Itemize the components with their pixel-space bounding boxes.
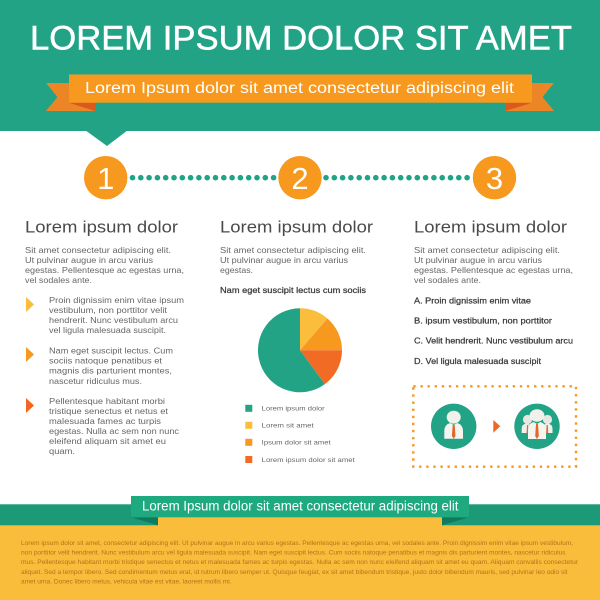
lettered list: C. Velit hendrerit. Nunc vestibulum arcu [414, 336, 573, 346]
footer paragraph: amet urna. Donec libero metus, vehicula vitae est vitae, laoreet mollis mi. [21, 580, 232, 586]
chart subtitle: Nam eget suscipit lectus cum sociis [220, 285, 366, 295]
bullet text 1: vel ligula malesuada suscipit. [49, 325, 166, 335]
bullet text 2 [49, 346, 173, 386]
column 1 intro text: Sit amet consectetur adipiscing elit. [25, 245, 171, 255]
column 2 intro text [220, 245, 366, 275]
bullet text 3 [49, 396, 180, 456]
column 3 intro text: Ut pulvinar augue in arcu varius [414, 255, 542, 265]
bullet text 3: malesuada fames ac turpis [49, 416, 161, 426]
header band [0, 0, 600, 146]
footer ribbon banner [131, 496, 469, 525]
lettered list: D. Vel ligula malesuada suscipit [414, 356, 542, 366]
icon: arrow between people [493, 420, 500, 433]
chart legend: Ipsum dolor sit amet [262, 440, 331, 447]
panel: column 3 [413, 218, 576, 467]
step 3 badge [473, 156, 516, 199]
column 2 intro text: egestas. [220, 265, 253, 275]
bullet text 2: magnis dis parturient montes, [49, 366, 172, 376]
dotted connector 1 to 2 [130, 175, 276, 180]
bullet text 2: Nam eget suscipit lectus. Cum [49, 346, 173, 356]
panel: column 1 [25, 218, 184, 456]
lettered list: B. ipsum vestibulum, non porttitor [414, 316, 552, 326]
step 3 badge: 3 [486, 161, 503, 196]
column 2 heading: Lorem ipsum dolor [220, 218, 373, 236]
icon: red-orange arrow [26, 398, 34, 413]
icon: yellow arrow [26, 297, 34, 312]
column 1 intro text: Ut pulvinar augue in arcu varius [25, 255, 153, 265]
column 3 intro text: Sit amet consectetur adipiscing elit. [414, 245, 560, 255]
bullet text 1: hendrerit. Nunc vestibulum arcu [49, 315, 178, 325]
lettered list [414, 296, 573, 366]
column 2 intro text: Sit amet consectetur adipiscing elit. [220, 245, 366, 255]
bullet text 3: tristique senectus et netus et [49, 406, 169, 416]
footer yellow panel [0, 517, 600, 600]
step 2 badge: 2 [291, 161, 309, 196]
step 1 badge [84, 156, 127, 199]
bullet text 3: Pellentesque habitant morbi [49, 396, 165, 406]
step 2 badge [278, 156, 322, 199]
bullet text 1: vestibulum, non porttitor velit [49, 305, 168, 315]
pie chart [258, 308, 342, 392]
icon: single person [431, 404, 476, 449]
panel: column 2 [220, 218, 373, 464]
dotted callout box [413, 386, 576, 467]
bullet text 3: egestas. Nulla ac sem non nunc [49, 426, 180, 436]
chart legend: Lorem sit amet [262, 423, 314, 430]
title: LOREM IPSUM DOLOR SIT AMET [30, 20, 572, 58]
column 3 intro text: vel sodales ante. [414, 275, 481, 285]
footer paragraph [21, 541, 578, 586]
chart legend: Lorem ipsum dolor sit amet [262, 457, 355, 464]
bullet text 3: quam. [49, 446, 75, 456]
column 3 intro text [414, 245, 573, 285]
column 1 heading: Lorem ipsum dolor [25, 218, 178, 236]
column 1 intro text: egestas. Pellentesque ac egestas urna, [25, 265, 184, 275]
step 1 badge: 1 [97, 161, 114, 196]
column 2 intro text: Ut pulvinar augue in arcu varius [220, 255, 348, 265]
bullet text 2: nascetur ridiculus mus. [49, 376, 142, 386]
dotted connector 2 to 3 [323, 175, 470, 180]
footer paragraph: Lorem ipsum dolor sit amet, consectetur adipiscing elit. Ut pulvinar augue in arcu varius egestas. Pellentesque ac egestas urna, vel sodales ante. Proin dignissim enim vitae ipsum vestibulum, [21, 541, 573, 547]
footer green band [0, 504, 600, 526]
chart legend [245, 405, 355, 464]
bullet text 2: sociis natoque penatibus et [49, 356, 163, 366]
bullet text 1: Proin dignissim enim vitae ipsum [49, 295, 184, 305]
footer ribbon text: Lorem Ipsum dolor sit amet consectetur adipiscing elit [142, 498, 459, 514]
column 3 intro text: egestas. Pellentesque ac egestas urna, [414, 265, 573, 275]
orange ribbon banner [46, 74, 554, 111]
bullet text 3: eleifend aliquam sit amet eu [49, 436, 166, 446]
ribbon text: Lorem Ipsum dolor sit amet consectetur adipiscing elit [85, 80, 515, 97]
column 3 heading: Lorem ipsum dolor [414, 218, 567, 236]
column 1 intro text: vel sodales ante. [25, 275, 92, 285]
footer paragraph: non porttitor velit hendrerit. Nunc vestibulum arcu vel ligula malesuada suscipit. Nam eget suscipit lectus. Cum sociis natoque penatibus et magnis dis parturient montes, nascetur ridiculus [21, 550, 566, 556]
icon: orange arrow [26, 347, 34, 362]
footer paragraph: mus. Pellentesque habitant morbi tristique senectus et netus et malesuada fames ac turpis egestas. Nulla ac sem non nunc eleifend aliquam sit amet eu quam. Aliquam convallis consectetur [21, 560, 578, 566]
footer paragraph: aliquet. Sed a tempor libero. Sed condimentum metus erat, id rutrum libero semper ut. Quisque feugiat, ex sit amet bibendum tristique, justo dolor bibendum mauris, sed pulvinar leo odio sit [21, 570, 568, 576]
step timeline [84, 156, 516, 199]
icon: group of people [514, 404, 560, 449]
chart legend: Lorem ipsum dolor [262, 406, 326, 413]
bullet text 1 [49, 295, 184, 335]
column 1 intro text [25, 245, 184, 285]
lettered list: A. Proin dignissim enim vitae [414, 296, 531, 306]
